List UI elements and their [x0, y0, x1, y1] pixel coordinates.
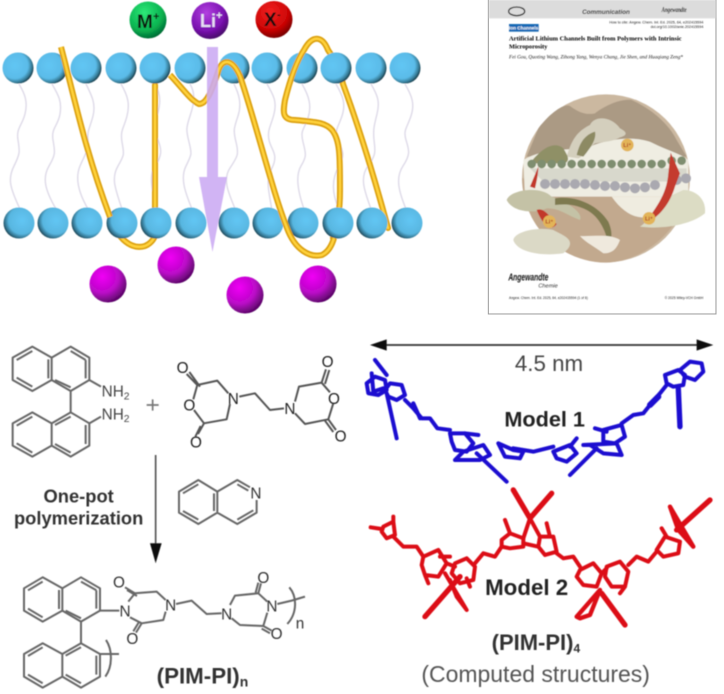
- ion: X-: [256, 1, 292, 38]
- reactant: EDTA dianhydride: O: [328, 391, 340, 408]
- reactant: EDTA dianhydride: N: [228, 391, 239, 408]
- article heading block: [508, 20, 703, 60]
- product: PIM-PI polymer: N: [119, 604, 131, 621]
- ion: Li+: +: [216, 10, 222, 22]
- article heading block: Microporosity: [509, 43, 548, 50]
- product: PIM-PI polymer: N: [266, 599, 278, 616]
- dimension label: 4.5 nm: [515, 351, 583, 376]
- journal logo: [508, 273, 558, 289]
- panel: polymer synthesis scheme: [13, 347, 347, 689]
- reaction label: polymerization: [14, 508, 143, 529]
- plus sign: [147, 399, 159, 411]
- product label: (PIM-PI): [157, 663, 240, 688]
- journal logo: Chemie: [538, 283, 558, 289]
- bottom bead row: [4, 208, 422, 238]
- ion: M+: +: [153, 11, 159, 23]
- product: PIM-PI polymer: [24, 570, 305, 688]
- arrow: lithium transport: [199, 47, 227, 252]
- gold strand in front of beads: [61, 39, 334, 256]
- product: PIM-PI polymer: N: [221, 606, 232, 623]
- label: polymer name: 4: [573, 642, 580, 656]
- cover artwork: dragon and membrane: [507, 94, 705, 263]
- arrow: reaction: [150, 455, 162, 563]
- journal logo: Angewandte: [508, 273, 549, 284]
- product: PIM-PI polymer: n: [296, 615, 304, 632]
- molecule: model 1: [367, 360, 703, 482]
- journal header bar: [489, 0, 716, 18]
- panel: computed molecular models: [367, 339, 713, 687]
- label: model 2: Model 2: [485, 575, 568, 600]
- reaction label: One-pot: [44, 486, 114, 507]
- ion: X-: -: [277, 9, 281, 21]
- product: PIM-PI polymer: O: [271, 626, 283, 643]
- dimension arrow: [370, 339, 713, 351]
- product: PIM-PI polymer: O: [113, 574, 125, 591]
- reactant: binaphthyl diamine: NH: [102, 384, 124, 401]
- article heading block: Fei Gou, Quoting Wang, Zihong Yang, Wenya Chang, Jie Shen, and Huaqiang Zeng*: [508, 55, 683, 60]
- ion: X-: X: [264, 10, 277, 31]
- label: model 1: Model 1: [504, 407, 585, 432]
- panel: lipid membrane channel diagram: [2, 1, 422, 314]
- cover artwork: dragon and membrane: Li⁺: [623, 142, 631, 149]
- reactant: EDTA dianhydride: N: [284, 401, 296, 418]
- page footer: [509, 296, 704, 300]
- reactant: binaphthyl diamine: NH: [102, 406, 124, 423]
- page footer: Angew. Chem. Int. Ed. 2025, 64, e202415594 (1 of 6): [509, 296, 588, 300]
- page frame: [488, 0, 716, 314]
- reactant: EDTA dianhydride: O: [177, 360, 189, 377]
- product: PIM-PI polymer: O: [257, 570, 269, 587]
- ion: M+: [130, 2, 166, 38]
- cover artwork: dragon and membrane: Li⁺: [645, 215, 653, 222]
- lithium ions below membrane: [90, 246, 336, 314]
- reactant: binaphthyl diamine: 2: [124, 414, 130, 425]
- gold strand behind beads: [110, 50, 388, 247]
- catalyst: isoquinoline: [179, 480, 262, 524]
- journal header bar: Communication: [582, 9, 630, 16]
- reactant: EDTA dianhydride: O: [190, 434, 202, 451]
- article heading block: Ion Channels: [509, 26, 539, 31]
- top bead row: [2, 52, 420, 84]
- reactant: EDTA dianhydride: [177, 354, 347, 451]
- reactant: EDTA dianhydride: O: [335, 429, 347, 446]
- product: PIM-PI polymer: N: [165, 598, 176, 615]
- reaction label: [14, 486, 143, 529]
- article heading block: doi.org/10.1002/anie.202415594: [651, 25, 703, 29]
- lipid stems: [530, 168, 687, 182]
- catalyst: isoquinoline: N: [250, 485, 262, 502]
- article heading block: Artificial Lithium Channels Built from Polymers with Intrinsic: [509, 35, 682, 42]
- reactant: binaphthyl diamine: 2: [124, 391, 130, 402]
- molecule: model 2: [371, 490, 710, 625]
- article heading block: How to cite: Angew. Chem. Int. Ed. 2025, 64, e202415594: [609, 20, 703, 24]
- reactant: binaphthyl diamine: [13, 347, 130, 457]
- product label: n: [240, 673, 248, 689]
- cover artwork: dragon and membrane: Li⁺: [545, 219, 553, 226]
- ion: Li+: [192, 2, 228, 39]
- lipid tails: [10, 84, 413, 211]
- page footer: © 2025 Wiley-VCH GmbH: [665, 296, 704, 300]
- product: PIM-PI polymer: O: [126, 631, 138, 648]
- journal header bar: Angewandte: [661, 5, 687, 14]
- reactant: EDTA dianhydride: O: [183, 398, 195, 415]
- reactant: EDTA dianhydride: O: [322, 354, 334, 371]
- label: computed structures: (Computed structures): [421, 661, 650, 687]
- label: polymer name: (PIM-PI): [492, 630, 573, 655]
- ion: Li+: Li: [200, 11, 216, 31]
- panel: journal article page: [488, 0, 716, 314]
- ion: M+: M: [137, 12, 153, 33]
